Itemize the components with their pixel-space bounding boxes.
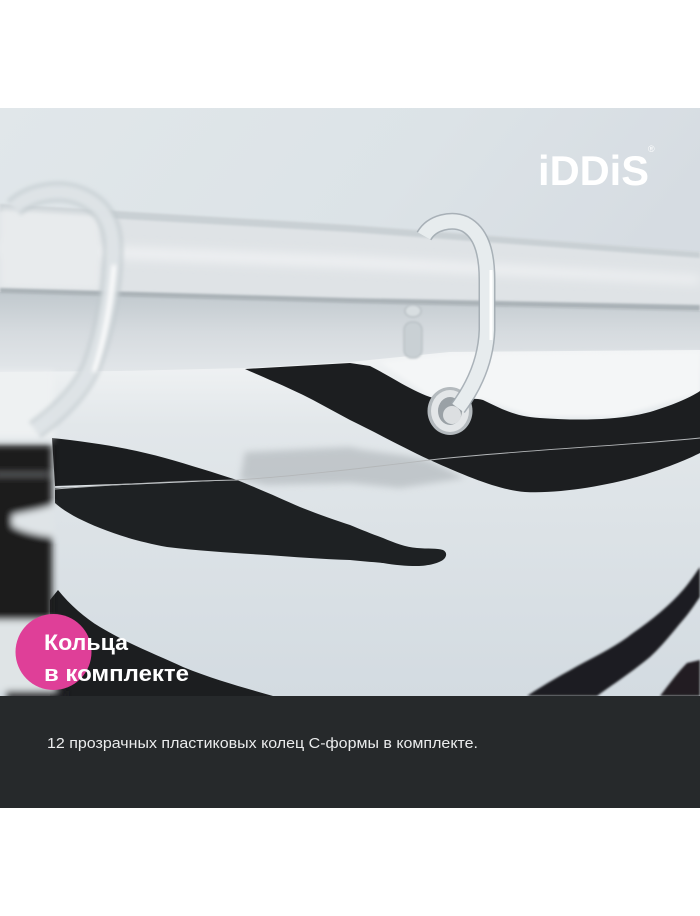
bottom left black stripe xyxy=(50,590,273,696)
iDDiS logo: iDDiS xyxy=(538,147,649,194)
ghost ring behind xyxy=(404,305,422,358)
curtain fabric xyxy=(0,350,700,701)
left black stripe upper xyxy=(52,438,237,486)
shadow band below rod xyxy=(0,290,700,375)
grey translucent fold xyxy=(240,447,465,488)
corner black stripe xyxy=(660,660,700,696)
dark caption bar xyxy=(0,696,700,808)
centre black stripe with tip xyxy=(55,480,446,566)
right ring with eyelet xyxy=(404,221,491,435)
callout: pink circle and heading: в комплекте xyxy=(44,661,189,686)
pink circle xyxy=(16,614,92,690)
callout: pink circle and heading xyxy=(16,614,189,690)
wall background xyxy=(0,108,700,252)
iDDiS logo: ® xyxy=(648,144,655,154)
curtain rod xyxy=(0,204,700,311)
blurred left curtain fold xyxy=(0,407,62,696)
caption text: 12 прозрачных пластиковых колец С-формы в комплекте. xyxy=(47,735,478,752)
photo: curtain on rod with rings xyxy=(0,108,700,701)
right bottom black stripe xyxy=(527,567,700,696)
eyelet xyxy=(428,387,472,435)
fabric bright top xyxy=(410,378,698,417)
black stripe under eyelet xyxy=(245,363,700,492)
left ring (blurred) xyxy=(14,192,114,430)
ring body xyxy=(424,221,491,408)
heading: Кольца xyxy=(44,630,129,655)
stitch line xyxy=(55,438,700,489)
